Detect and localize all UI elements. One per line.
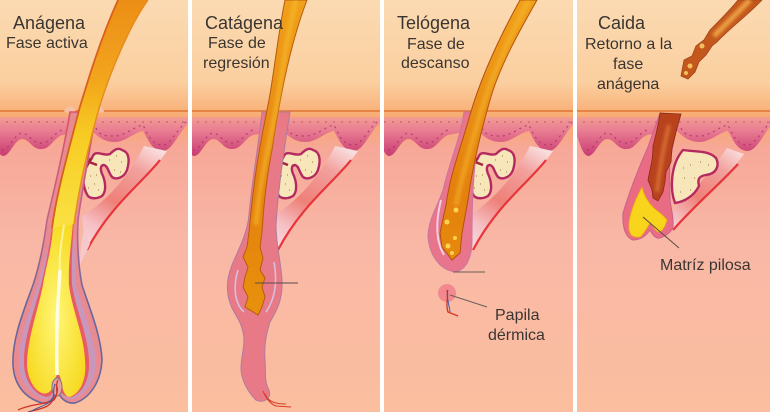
panel: Catágena <box>192 0 380 412</box>
panel: Caida <box>575 0 770 412</box>
empty follicle sheath <box>623 113 680 240</box>
label: Fase de descanso: Fase de <box>407 36 465 53</box>
skin layers <box>0 111 200 156</box>
heading: Telógena: Telógena <box>397 13 471 33</box>
panel: Telógena <box>376 0 586 412</box>
label: Retorno a la fase anágena: fase <box>613 56 643 73</box>
papilla vessels <box>263 391 291 407</box>
label: Fase de regresión <box>203 35 270 72</box>
club granules <box>444 208 458 255</box>
label: Retorno a la fase anágena: Retorno a la <box>585 36 672 53</box>
root highlight <box>657 125 669 192</box>
pointer line <box>255 282 298 284</box>
dermal papilla <box>18 378 62 412</box>
heading: Anágena: Anágena <box>13 13 86 33</box>
skin layers <box>575 111 770 156</box>
label: Fase de regresión: regresión <box>203 55 270 72</box>
detached dermal papilla <box>438 284 458 316</box>
label: Fase de descanso <box>402 38 469 68</box>
follicle bulb sheath <box>13 112 102 403</box>
new hair matrix <box>629 187 667 237</box>
sebaceous gland <box>672 150 718 203</box>
heading: Caida: Caida <box>598 13 646 33</box>
hair highlight <box>256 0 296 225</box>
hair highlight <box>456 0 529 205</box>
inner sheath highlights <box>235 262 276 312</box>
label: Fase de regresión: Fase de <box>208 35 266 52</box>
label: Retorno a la fase anágena <box>585 36 672 93</box>
label: Papila dérmica: dérmica <box>488 327 545 344</box>
label: Fase activa: Fase activa <box>6 35 88 52</box>
arrector muscle <box>80 146 167 265</box>
shed hair <box>681 0 762 79</box>
telogen follicle sheath <box>428 112 482 272</box>
panel: Anágena <box>0 0 200 412</box>
arrector muscle <box>273 146 358 250</box>
label: Retorno a la fase anágena: anágena <box>597 76 659 93</box>
pointer line to papilla <box>450 295 487 307</box>
telogen hair club <box>440 0 537 260</box>
pointer line to follicle base <box>453 272 485 273</box>
pointer line to matrix <box>643 217 679 248</box>
sebaceous gland <box>274 149 320 198</box>
skin layers <box>181 111 391 156</box>
inner sheath highlight <box>437 200 444 255</box>
skin layers <box>376 111 586 156</box>
sebaceous gland <box>83 149 129 198</box>
follicle opening <box>64 106 104 114</box>
heading: Catágena: Catágena <box>205 13 284 33</box>
sebaceous gland <box>469 149 515 198</box>
arrector muscle <box>672 148 744 230</box>
label: Matríz pilosa: Matríz pilosa <box>660 257 751 274</box>
hair shaft <box>52 0 148 375</box>
label: Papila dérmica: Papila <box>495 307 540 324</box>
arrector muscle <box>468 146 553 250</box>
label: Papila dérmica <box>488 308 545 340</box>
label: Fase de descanso: descanso <box>401 55 470 72</box>
remaining hair root <box>648 113 681 201</box>
regressing follicle sheath <box>228 112 290 401</box>
catagen hair club <box>243 0 307 315</box>
